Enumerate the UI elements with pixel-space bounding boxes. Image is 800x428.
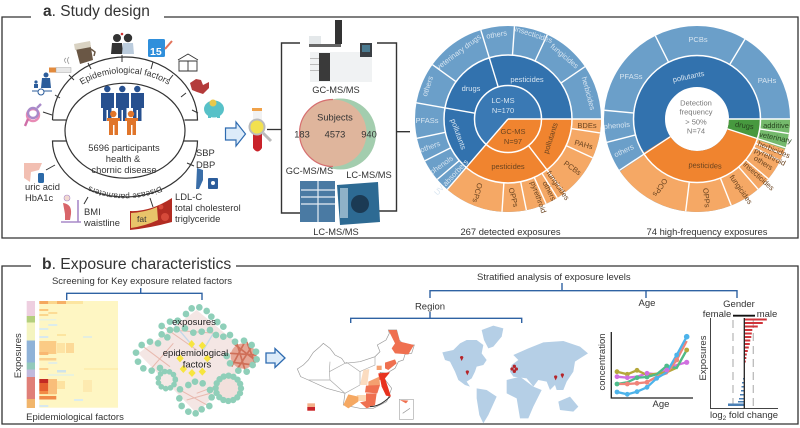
arc text: epidemiological factors: Epidemiological factors (79, 66, 170, 84)
heading: exposure characteristics: b. Exposure characteristics (42, 256, 231, 273)
venn diagram: GC-MS/MS (286, 166, 333, 176)
icon: orange participants (107, 111, 138, 135)
chart: sunburst of 267 detected exposures: others (419, 139, 442, 154)
venn diagram: Subjects (317, 112, 353, 122)
icon: gender (25, 104, 41, 126)
icon: LC-MS instrument (300, 181, 380, 225)
text: participants: health & (106, 153, 141, 164)
icon: blood tube with magnifier (250, 108, 271, 152)
chart: sunburst of 74 high-frequency exposures (603, 35, 793, 211)
icon: beer mug (74, 41, 95, 64)
connector: sample to instruments (267, 128, 281, 130)
text: participants: chornic disease (91, 164, 157, 175)
chart: sunburst of 74 high-frequency exposures: herbicides (756, 139, 792, 160)
chart: sunburst of 74 high-frequency exposures: N=74 (687, 126, 705, 136)
text: SBP, DBP: DBP (196, 159, 215, 170)
chart: sunburst of 74 high-frequency exposures: pesticides (688, 160, 722, 171)
icon: fat artery: fat (137, 214, 147, 224)
text: uric acid, HbA1c: HbA1c (25, 192, 53, 203)
bracket: instruments (282, 43, 410, 213)
panel: study design frame (2, 17, 798, 238)
chart: sunburst of 74 high-frequency exposures: pyrethroid (753, 146, 787, 168)
label: screening for key exposure related factors: Screening for Key exposure related factors (52, 276, 232, 287)
label: GC-MS/MS: GC-MS/MS (312, 85, 360, 95)
chart: gender fold change: 2 (723, 415, 727, 422)
bracket: region (351, 312, 522, 323)
chart: sunburst of 267 detected exposures: PCBs (562, 159, 583, 177)
icon: BMI scale (61, 195, 81, 222)
chart: sunburst of 267 detected exposures: pollutants (449, 118, 468, 151)
chart: gender fold change: female (703, 309, 731, 320)
chart: sunburst of 74 high-frequency exposures: pollutants (672, 69, 705, 84)
chart: network (133, 304, 260, 417)
chart: sunburst of 267 detected exposures: GC-MS (500, 127, 526, 136)
label: exposures axis: Exposures (13, 333, 24, 378)
text: lipids: total cholesterol (175, 202, 241, 213)
text: participants (88, 142, 160, 175)
chart: sunburst of 267 detected exposures: phenols (428, 154, 455, 176)
bracket: stratified analysis (430, 283, 737, 298)
label: epidemiological factors axis: Epidemiological factors (26, 412, 124, 423)
panel: exposure characteristics frame (2, 266, 798, 424)
map: China (297, 330, 414, 419)
icon: exercise (32, 72, 52, 95)
icon: book (178, 54, 198, 71)
chart: network: exposures (172, 317, 216, 328)
chart: sunburst of 267 detected exposures: fungicides (545, 169, 572, 202)
chart: sunburst of 267 detected exposures: OPPs (507, 187, 520, 208)
chart: sunburst of 267 detected exposures: others (420, 75, 435, 98)
icon: calendar (148, 39, 172, 58)
text: lipids: triglyceride (175, 213, 220, 224)
chart: sunburst of 267 detected exposures: veterinary drugs (434, 32, 483, 72)
chart: sunburst of 267 detected exposures: fungicides (549, 42, 581, 71)
text: lipids: LDL-C (175, 191, 202, 202)
label: gender: Gender (723, 299, 755, 310)
chart: sunburst of 74 high-frequency exposures: additive (763, 121, 789, 130)
chart: heatmap (27, 301, 118, 408)
chart: sunburst of 74 high-frequency exposures: insecticides (741, 160, 776, 193)
chart: sunburst of 74 high-frequency exposures: fungicides (728, 173, 755, 206)
chart: sunburst of 267 detected exposures: pesticides (510, 75, 544, 84)
caption: 267 detected exposures: 267 detected exposures (460, 226, 561, 237)
chart: sunburst of 267 detected exposures: UV absorbers (432, 157, 470, 197)
text: BMI, waistline (83, 206, 120, 228)
chart: sunburst of 267 detected exposures: LC-MS (491, 96, 515, 105)
chart: sunburst of 74 high-frequency exposures: phenols (603, 120, 631, 131)
chart: sunburst of 74 high-frequency exposures: PFASs (620, 72, 643, 81)
label: region: Region (415, 302, 445, 313)
venn diagram: 183 (294, 130, 310, 140)
chart: sunburst of 267 detected exposures: N=170 (492, 106, 514, 115)
icon: fat artery (130, 198, 172, 230)
chart: sunburst of 267 detected exposures: others (486, 28, 508, 41)
icon: couple (111, 33, 134, 54)
text: participants: 5696 participants (88, 142, 160, 153)
chart: network: epidemiological (163, 348, 228, 359)
chart: concentration by age: concentration (597, 333, 608, 391)
icon: blood pressure (196, 168, 218, 189)
chart: concentration by age: Age (653, 399, 669, 410)
chart: sunburst of 74 high-frequency exposures: Detection (680, 98, 712, 108)
chart: sunburst of 74 high-frequency exposures: frequency (680, 108, 713, 116)
diagram: participant wheel (42, 55, 198, 208)
icon: piggy bank (204, 100, 224, 118)
chart: sunburst of 267 detected exposures: pyrethroid (528, 180, 548, 214)
caption: 74 high-frequency exposures: 74 high-frequency exposures (647, 226, 768, 237)
chart: network: factors (183, 360, 212, 370)
chart: sunburst of 267 detected exposures: insecticides (514, 24, 554, 45)
chart: gender fold change: log (710, 410, 723, 421)
chart: sunburst of 74 high-frequency exposures: others (613, 142, 636, 159)
label: age: Age (639, 298, 655, 309)
text: BMI, waistline: BMI (84, 206, 101, 217)
heading: study design: a. Study design (43, 3, 150, 20)
arc text: disease parameters: Disease parameters (88, 186, 162, 198)
chart: sunburst of 74 high-frequency exposures: OPPs (701, 188, 712, 208)
chart: concentration by age (597, 332, 693, 410)
venn diagram (286, 98, 392, 180)
chart: sunburst of 267 detected exposures (416, 24, 601, 214)
icon: calendar: 15 (150, 46, 162, 58)
venn diagram: 940 (361, 130, 377, 140)
chart: gender fold change: Exposures (698, 335, 709, 380)
chart: sunburst of 267 detected exposures: herbicides (580, 76, 597, 111)
icon: GC-MS instrument (309, 20, 372, 82)
icon: China map (190, 79, 209, 94)
chart: sunburst of 74 high-frequency exposures: PCBs (688, 35, 708, 44)
bracket: screening (67, 288, 202, 300)
chart: sunburst of 267 detected exposures: BDEs (577, 121, 597, 130)
label: LC-MS/MS: LC-MS/MS (313, 227, 359, 237)
chart: sunburst of 267 detected exposures: pesticides (491, 162, 525, 171)
text: SBP, DBP (196, 147, 215, 170)
chart: sunburst of 267 detected exposures: OCPs (470, 182, 484, 204)
chart: gender fold change (698, 309, 778, 422)
text: BMI, waistline: waistline (83, 217, 120, 228)
venn diagram: 4573 (325, 130, 345, 140)
icon: blue participants (101, 86, 144, 121)
chart: sunburst of 267 detected exposures: pollutants (541, 121, 560, 155)
arrow: to stratified analysis (266, 348, 285, 368)
chart: sunburst of 74 high-frequency exposures: drugs (734, 120, 755, 131)
chart: sunburst of 74 high-frequency exposures: veterinary (758, 130, 793, 145)
icon: cigarette (49, 57, 71, 72)
chart: gender fold change: fold change (726, 410, 778, 421)
icon: hand and glucose meter (24, 163, 44, 183)
label: stratified analysis: Stratified analysis of exposure levels (477, 272, 631, 283)
map: world (442, 326, 588, 423)
arrow: to sampling (226, 122, 246, 146)
chart: sunburst of 267 detected exposures: drugs (462, 84, 481, 93)
chart: sunburst of 74 high-frequency exposures: others (752, 154, 775, 172)
chart: gender fold change: male (757, 309, 777, 320)
text: uric acid, HbA1c: uric acid (25, 181, 60, 192)
chart: sunburst of 267 detected exposures: others (540, 180, 558, 202)
text: SBP, DBP: SBP (196, 147, 215, 158)
text: uric acid, HbA1c (25, 181, 60, 203)
exposure category bar (27, 301, 35, 408)
chart: sunburst of 74 high-frequency exposures: > 50% (685, 118, 707, 126)
venn diagram: LC-MS/MS (346, 170, 392, 180)
chart: sunburst of 74 high-frequency exposures: OCPs (650, 177, 669, 198)
chart: sunburst of 267 detected exposures: N=97 (504, 137, 522, 146)
chart: sunburst of 74 high-frequency exposures: PAHs (758, 76, 777, 85)
text: lipids (175, 191, 241, 224)
chart: sunburst of 267 detected exposures: PAHs (573, 138, 594, 151)
chart: sunburst of 267 detected exposures: PFASs (416, 116, 439, 125)
